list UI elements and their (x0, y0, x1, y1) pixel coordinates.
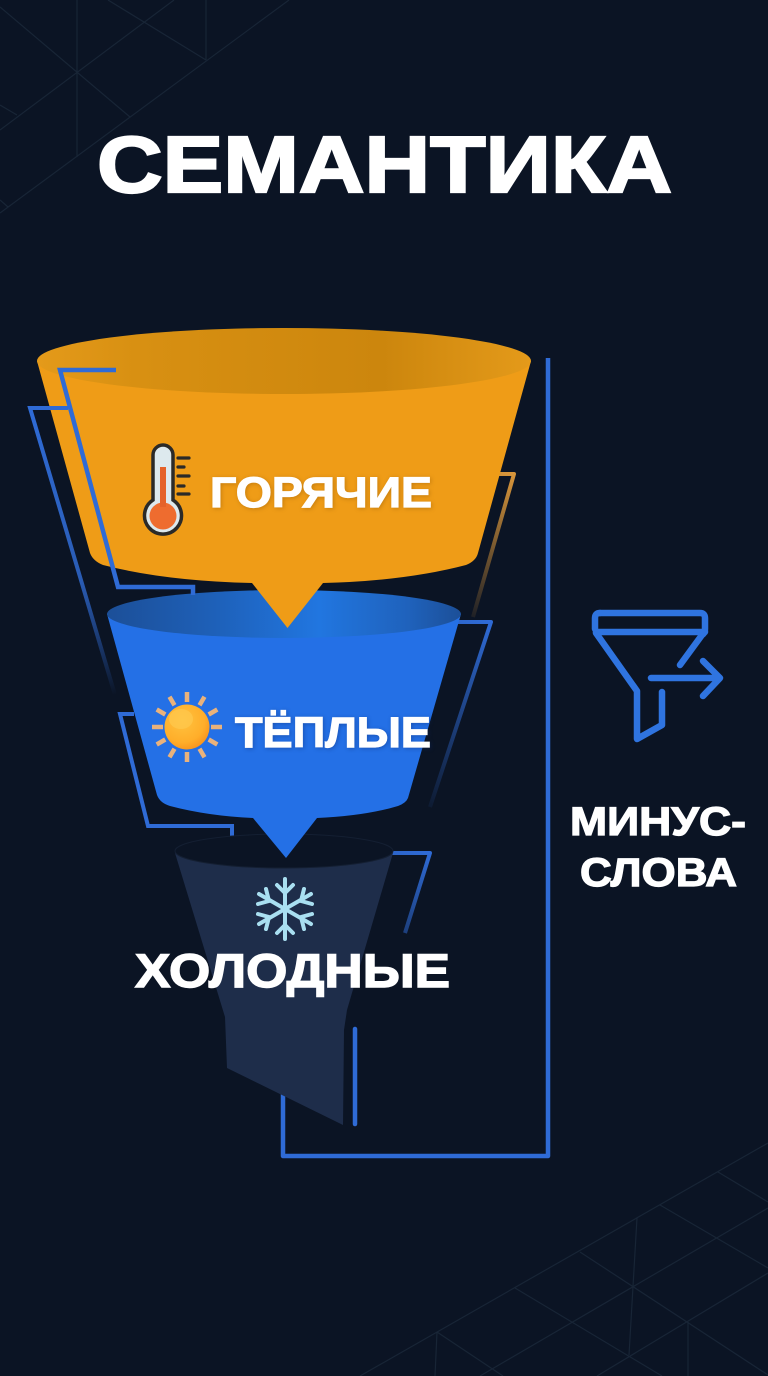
funnel tier: cold (175, 834, 393, 1125)
orange right connector (473, 474, 514, 617)
label: minus-words (570, 800, 746, 895)
label: cold: ХОЛОДНЫЕ (135, 944, 450, 997)
icon: filter funnel with arrow (595, 613, 720, 739)
label: minus-words: МИНУС- (570, 800, 746, 844)
short vertical line (353, 1029, 357, 1124)
label: warm: ТЁПЛЫЕ (235, 709, 431, 757)
icon: thermometer (144, 445, 189, 534)
title: СЕМАНТИКА (97, 120, 672, 209)
icon: sun (152, 692, 222, 762)
label: minus-words: СЛОВА (580, 851, 737, 895)
icon: snowflake (258, 879, 312, 939)
cold funnel opening (175, 834, 393, 868)
bracket: minus-words connector (283, 358, 548, 1156)
warm funnel opening (107, 590, 461, 638)
left inner connector (60, 370, 193, 595)
blue right connector (430, 622, 491, 807)
blue left connector (120, 714, 232, 837)
dark right connector (392, 853, 430, 933)
left outer connector (30, 408, 115, 695)
label: hot: ГОРЯЧИЕ (210, 469, 432, 517)
funnel tier: warm (107, 590, 461, 858)
hot funnel opening (37, 328, 531, 394)
funnel tier: hot (37, 328, 531, 628)
